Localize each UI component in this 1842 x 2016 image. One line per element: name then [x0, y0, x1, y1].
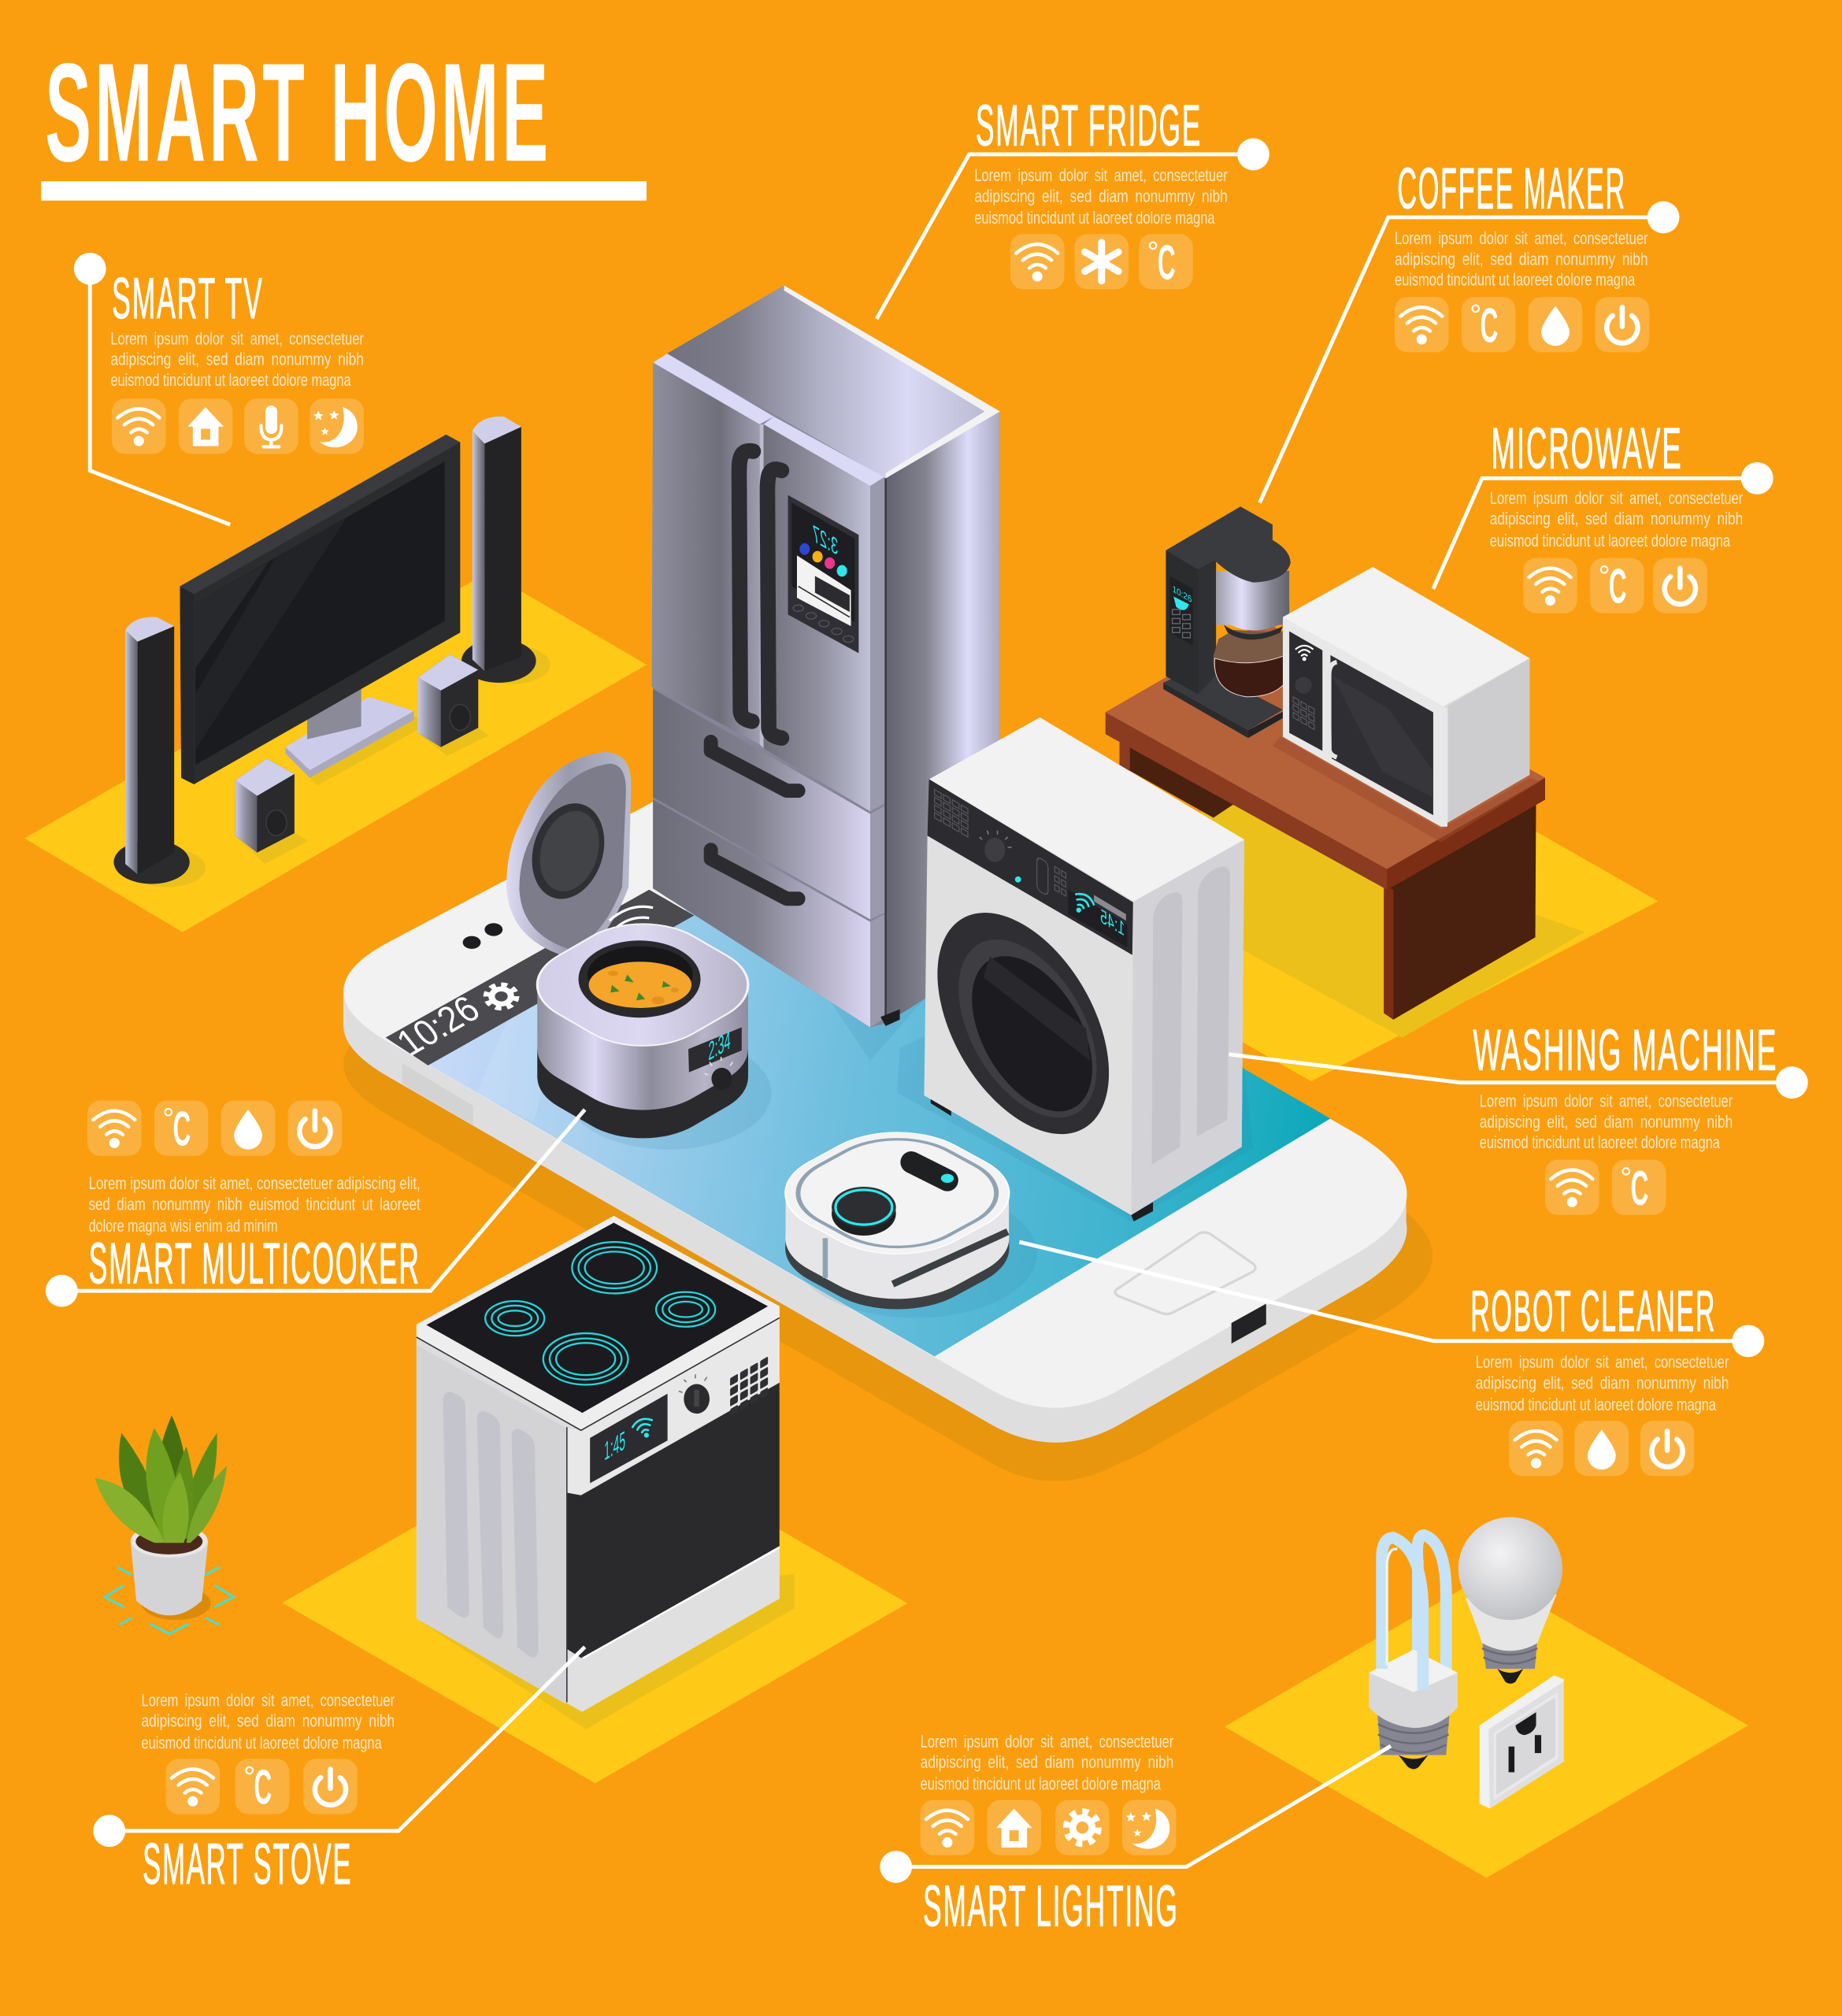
panel: Smart Stove: [142, 1691, 395, 1896]
carafe: [1214, 630, 1284, 697]
stove keypad: [730, 1356, 768, 1417]
text block: sed diam nonummy nibh euismod tincidunt ut laoreet: [89, 1194, 421, 1214]
text block: euismod tincidunt ut laoreet dolore magna: [110, 370, 351, 390]
text block: [89, 1173, 421, 1236]
panel: Smart Stove: SMART STOVE: [143, 1831, 352, 1896]
icon row: [921, 1800, 1176, 1855]
text block: euismod tincidunt ut laoreet dolore magna: [1480, 1132, 1720, 1152]
phone speaker grille: [402, 1063, 473, 1125]
text: SMART MULTICOOKER: [89, 1230, 421, 1295]
smart multicooker: [508, 907, 777, 1155]
charging port: [1232, 1304, 1266, 1343]
plant sensor brackets: [105, 1567, 234, 1634]
right door: [764, 424, 870, 811]
cooker display: [688, 1025, 742, 1090]
text block: adipiscing elit, sed diam nonummy nibh: [142, 1711, 395, 1731]
panel: Smart Multicooker: [87, 1101, 421, 1295]
phone status bar: 10:26: [389, 988, 487, 1064]
text block: [921, 1732, 1173, 1794]
text block: euismod tincidunt ut laoreet dolore magna: [142, 1732, 382, 1752]
pot with soup: [579, 940, 701, 1017]
floor: stove yellow diamond: [282, 1423, 907, 1783]
camera dots: [463, 923, 502, 949]
text block: Lorem ipsum dolor sit amet, consectetuer: [1480, 1091, 1733, 1111]
fridge handles: [711, 451, 799, 899]
icon row: [87, 1101, 342, 1157]
text block: [974, 165, 1228, 228]
text block: Lorem ipsum dolor sit amet, consectetuer: [142, 1691, 395, 1710]
floor: TV yellow diamond: [24, 573, 647, 932]
CFL bulb: [1369, 1535, 1458, 1770]
text block: euismod tincidunt ut laoreet dolore magna: [921, 1774, 1161, 1794]
icon row: [1545, 1160, 1666, 1216]
panel: Coffee Maker: [1395, 155, 1649, 353]
text block: adipiscing elit, sed diam nonummy nibh: [974, 186, 1228, 206]
callout lines: [61, 154, 1792, 1867]
home theatre: TV and speakers: [113, 417, 550, 888]
smartphone base: [343, 785, 1432, 1481]
cooker display: 2:34: [708, 1025, 731, 1066]
robot cleaner: [751, 1114, 1043, 1328]
icon row: C: [1158, 235, 1176, 290]
panel: Smart Lighting: [921, 1732, 1179, 1939]
text block: [1490, 488, 1743, 550]
lower drawer: [653, 800, 870, 1027]
phone top surface: [343, 785, 1407, 1408]
left tall speaker: [113, 617, 206, 888]
text block: euismod tincidunt ut laoreet dolore magna: [974, 208, 1215, 228]
icon row: C: [1481, 298, 1498, 353]
bulbs and socket: [1369, 1518, 1564, 1808]
coffee display: 10:26: [1173, 584, 1192, 605]
icon row: C: [1609, 560, 1627, 614]
floor: table yellow diamond: [1023, 737, 1659, 1081]
floor: lighting yellow diamond: [1225, 1575, 1748, 1877]
smart fridge: [652, 285, 1000, 1027]
fridge edge and foot: [885, 478, 887, 1022]
washer drum door: [937, 875, 1109, 1172]
title: [41, 34, 647, 201]
microwave: [1273, 567, 1540, 842]
text block: Lorem ipsum dolor sit amet, consectetuer: [110, 329, 364, 349]
table with shadow: [1106, 621, 1585, 1038]
small speaker left: [235, 758, 309, 864]
icon row: C: [254, 1761, 272, 1815]
icon row: [1523, 558, 1707, 614]
washer side grooves: [1151, 866, 1230, 1165]
plant leaves: [95, 1415, 227, 1543]
coffee display: [1169, 576, 1193, 646]
icon row: [166, 1758, 358, 1815]
fridge display: 3:27: [813, 521, 838, 561]
phone shadow: [343, 847, 1432, 1481]
icon row: [1010, 234, 1193, 290]
coffee maker: [1163, 506, 1291, 738]
text block: euismod tincidunt ut laoreet dolore magna: [1490, 531, 1731, 550]
phone side band: [343, 820, 1407, 1443]
stove knob: [679, 1374, 710, 1414]
text: SMART LIGHTING: [923, 1873, 1179, 1939]
text block: Lorem ipsum dolor sit amet, consectetuer: [921, 1732, 1173, 1751]
text block: adipiscing elit, sed diam nonummy nibh: [1490, 509, 1743, 528]
text block: adipiscing elit, sed diam nonummy nibh: [110, 350, 364, 369]
text block: [110, 329, 364, 390]
washer control panel: 1:45: [1100, 906, 1125, 941]
small speaker right: [417, 654, 488, 756]
robot status pill: [911, 1162, 954, 1183]
fridge display: [788, 495, 858, 653]
text block: adipiscing elit, sed diam nonummy nibh: [921, 1752, 1173, 1772]
stove side grooves: [443, 1392, 539, 1658]
text block: Lorem ipsum dolor sit amet, consectetuer: [974, 165, 1228, 185]
left door: [652, 362, 760, 744]
text block: euismod tincidunt ut laoreet dolore magna: [1476, 1395, 1717, 1414]
text block: Lorem ipsum dolor sit amet, consectetuer: [1490, 488, 1743, 508]
TV screen: [180, 435, 460, 784]
text block: [1395, 228, 1648, 289]
phone status bar: [386, 890, 694, 1065]
panel: Smart Fridge: SMART FRIDGE: [976, 92, 1202, 158]
icon row: C: [173, 1102, 191, 1157]
LED bulb: [1458, 1518, 1562, 1684]
title: SMART HOME: [45, 34, 551, 191]
TV stand: [285, 687, 421, 786]
text block: adipiscing elit, sed diam nonummy nibh: [1395, 249, 1648, 269]
text block: [142, 1691, 395, 1752]
stove display: [590, 1394, 668, 1483]
robot lidar button: [832, 1187, 896, 1236]
plant: [95, 1415, 234, 1634]
screen light rays: [477, 926, 585, 1122]
washing machine: [925, 717, 1244, 1221]
panel: Washing Machine: [1473, 1017, 1777, 1216]
text block: adipiscing elit, sed diam nonummy nibh: [1476, 1373, 1729, 1392]
icon row: [1395, 297, 1649, 353]
icon row: [1509, 1421, 1694, 1476]
text block: Lorem ipsum dolor sit amet, consectetuer: [1476, 1352, 1729, 1372]
appliance shadows on screen: [565, 888, 1253, 1317]
panel: Robot Cleaner: [1470, 1278, 1729, 1476]
smart stove: [417, 1216, 795, 1729]
home button: [1115, 1232, 1255, 1314]
phone screen: [428, 827, 1330, 1356]
icon row: [112, 398, 364, 454]
panel: Smart TV: SMART TV: [112, 265, 264, 331]
stove glass top with burners: [426, 1223, 768, 1413]
cooker lid: [506, 752, 631, 957]
panel: Smart Fridge: [974, 92, 1228, 290]
washer display: [1068, 890, 1127, 947]
icon row: C: [1630, 1162, 1648, 1216]
wifi waves on status bar: [610, 906, 653, 927]
text block: [1480, 1091, 1733, 1152]
right tall speaker: [461, 417, 550, 684]
stove display: 1:45: [604, 1425, 625, 1466]
text block: Lorem ipsum dolor sit amet, consectetuer: [1395, 228, 1648, 248]
text block: dolore magna wisi enim ad minim: [89, 1216, 278, 1236]
panel: Microwave: [1490, 415, 1743, 614]
text block: [1476, 1352, 1729, 1414]
gear icon: [487, 985, 516, 1007]
washer control panel: [928, 779, 1133, 955]
panel: Smart TV: [110, 265, 364, 454]
text block: euismod tincidunt ut laoreet dolore magna: [1395, 269, 1636, 289]
upper drawer: [653, 689, 870, 919]
text block: Lorem ipsum dolor sit amet, consectetuer adipiscing elit,: [89, 1173, 421, 1193]
socket: [1480, 1675, 1564, 1808]
text block: adipiscing elit, sed diam nonummy nibh: [1480, 1112, 1733, 1132]
